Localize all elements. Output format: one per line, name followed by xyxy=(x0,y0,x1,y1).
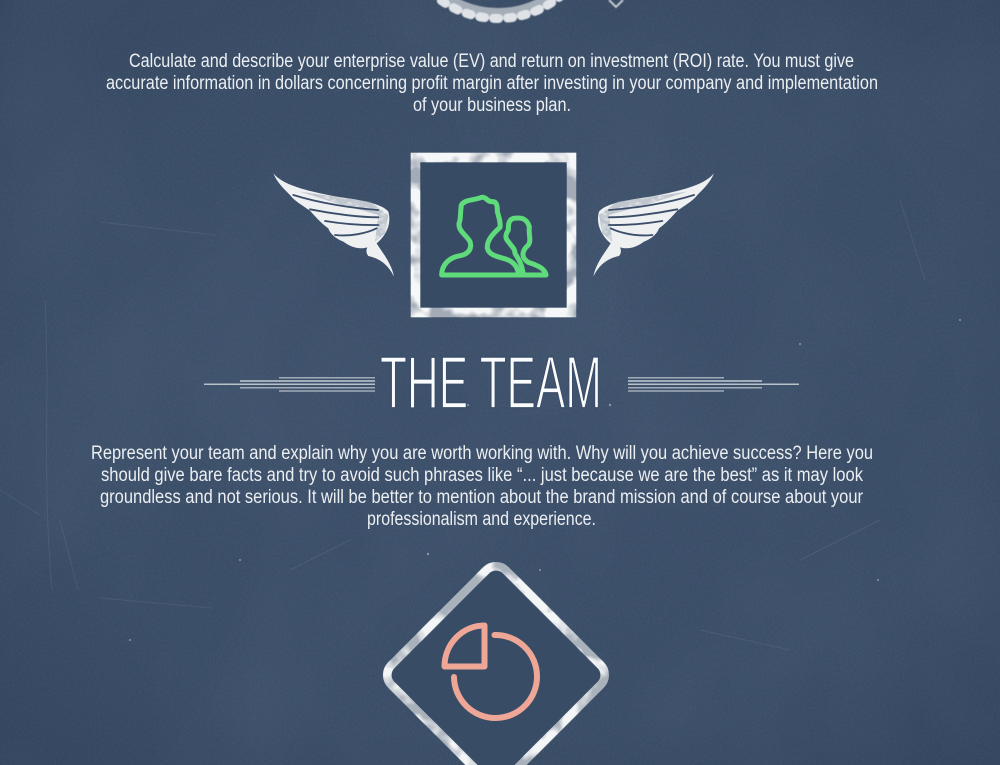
text block: team description: should give bare facts and try to avoid such phrases like “... just because we are the best” as it may look xyxy=(101,465,863,486)
icon: cropped badge at top xyxy=(400,0,623,18)
icon: team people xyxy=(442,197,546,275)
text block: enterprise value and ROI: of your business plan. xyxy=(413,95,571,116)
text block: team description: professionalism and experience. xyxy=(367,509,596,530)
text block: team description: groundless and not serious. It will be better to mention about the brand mission and of course about your xyxy=(100,487,864,508)
text block: enterprise value and ROI xyxy=(106,51,878,116)
text block: team description: Represent your team and explain why you are worth working with. Why will you achieve success? Here you xyxy=(91,443,873,464)
icon: square frame xyxy=(416,158,572,312)
divider: right lines xyxy=(628,378,799,391)
icon: diamond with pie chart xyxy=(381,560,611,765)
text block: enterprise value and ROI: accurate information in dollars concerning profit margin after investing in your company and implementation xyxy=(106,73,878,94)
text block: team description xyxy=(91,443,873,530)
icon: left wing xyxy=(273,173,394,277)
heading: the team: THE TEAM xyxy=(380,341,602,424)
divider: left lines xyxy=(204,378,375,391)
icon: pie chart xyxy=(444,626,537,718)
icon: right wing xyxy=(593,173,714,277)
text block: enterprise value and ROI: Calculate and describe your enterprise value (EV) and return on investment (ROI) rate. You must give xyxy=(129,51,854,72)
icon: team emblem with wings xyxy=(273,158,714,312)
icon: diamond frame xyxy=(381,560,611,765)
